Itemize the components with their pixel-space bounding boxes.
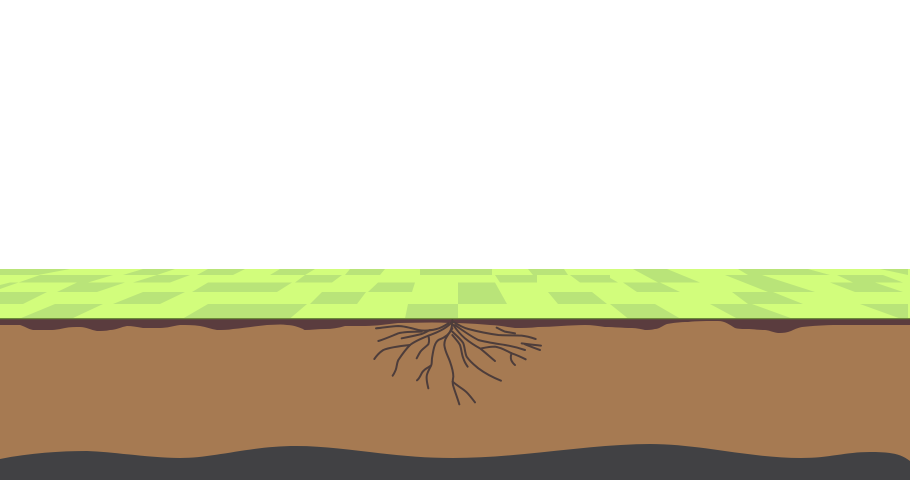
bedrock layer bbox=[0, 444, 910, 480]
grass edge line bbox=[0, 318, 910, 319]
soil layer bbox=[0, 319, 910, 480]
grass base bbox=[0, 269, 910, 319]
plant roots bbox=[374, 320, 541, 404]
grass surface bbox=[0, 269, 910, 319]
dark topsoil band bbox=[0, 318, 910, 333]
checker tiles bbox=[0, 269, 908, 318]
sky background bbox=[0, 0, 910, 269]
